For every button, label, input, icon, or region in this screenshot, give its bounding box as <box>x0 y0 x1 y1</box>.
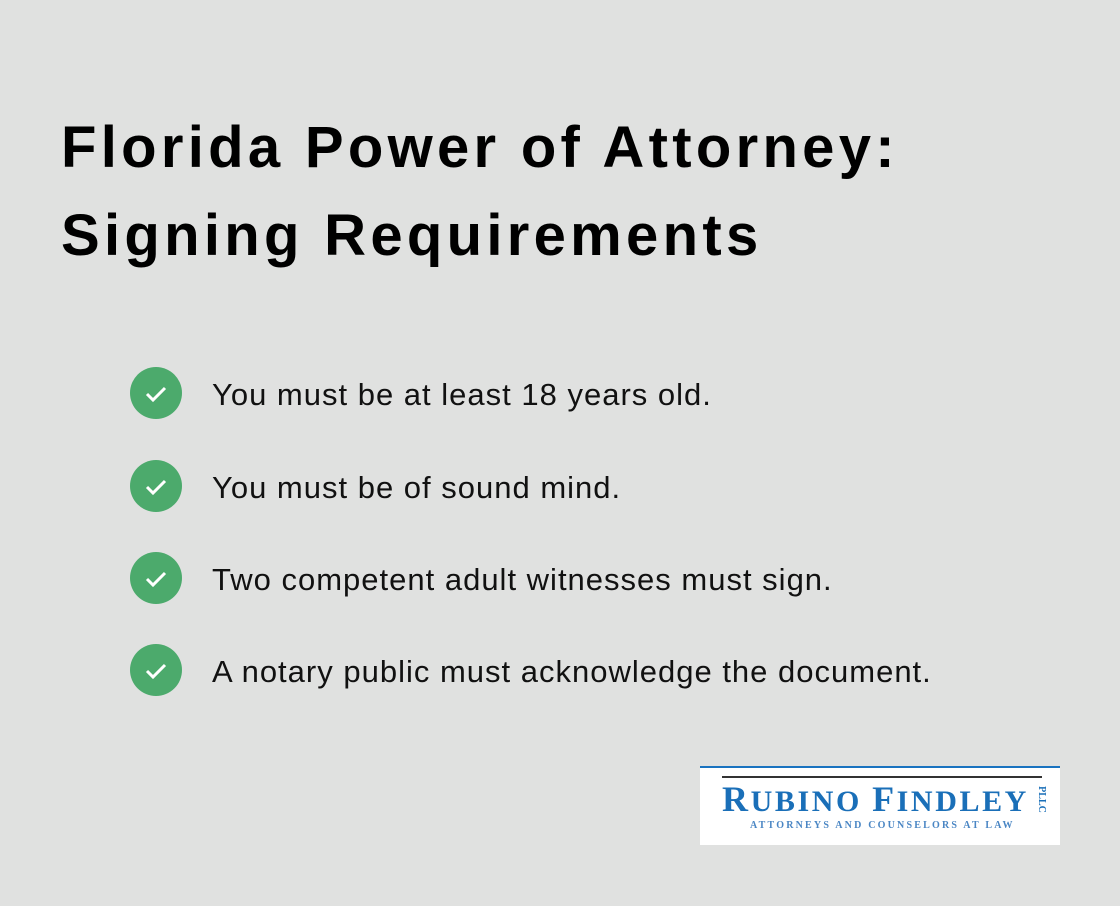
item 3: Two competent adult witnesses must sign. <box>212 562 833 597</box>
item 4 <box>130 644 932 696</box>
title: Signing Requirements <box>61 203 763 268</box>
item 3 <box>130 552 833 604</box>
title <box>61 115 899 268</box>
item 2: You must be of sound mind. <box>212 470 621 505</box>
item 4: A notary public must acknowledge the document. <box>212 654 932 689</box>
logo <box>700 766 1060 845</box>
item 2 <box>130 460 621 512</box>
item 1 <box>130 367 712 419</box>
title: Florida Power of Attorney: <box>61 115 899 180</box>
logo: RUBINO FINDLEY <box>722 779 1029 819</box>
logo: ATTORNEYS AND COUNSELORS AT LAW <box>750 820 1015 831</box>
item 1: You must be at least 18 years old. <box>212 377 712 412</box>
logo: PLLC <box>1036 786 1047 813</box>
